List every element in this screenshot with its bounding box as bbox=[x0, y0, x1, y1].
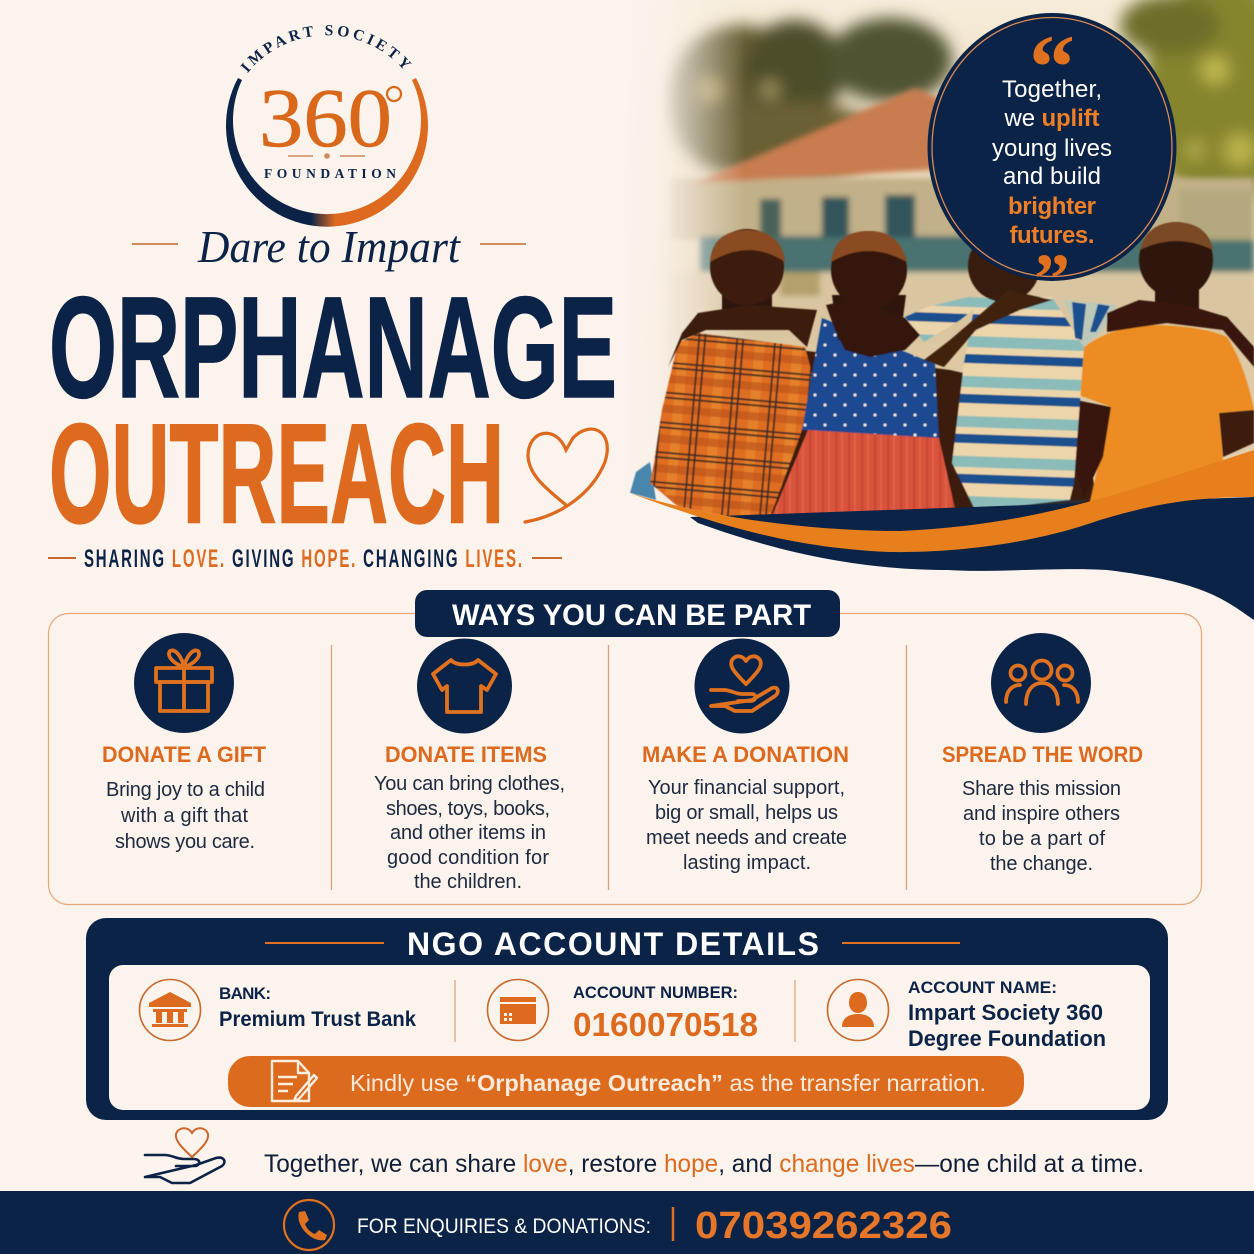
script tagline: Dare to Impart: Dare to Impart bbox=[197, 221, 461, 272]
item: make a donation: MAKE A DONATION bbox=[642, 742, 849, 767]
item: make a donation bbox=[642, 638, 849, 874]
child 2 polka dot top bbox=[802, 318, 939, 440]
icon: document and pen bbox=[272, 1061, 317, 1101]
icon: hand with heart bbox=[145, 1128, 224, 1183]
quote text: futures. bbox=[1010, 222, 1094, 249]
icon: bank bbox=[149, 992, 191, 1027]
item: spread the word: to be a part of bbox=[979, 828, 1105, 850]
child 1 plaid shirt bbox=[650, 333, 815, 528]
item: donate items: DONATE ITEMS bbox=[385, 742, 547, 767]
item: donate a gift: Bring joy to a child bbox=[106, 779, 265, 801]
child 4 shirt bbox=[1080, 324, 1254, 502]
title: ORPHANAGE: ORPHANAGE bbox=[49, 267, 617, 428]
item: spread the word: the change. bbox=[990, 853, 1093, 875]
quote text bbox=[992, 76, 1112, 249]
item: donate a gift bbox=[102, 633, 267, 853]
bank: BANK: bbox=[219, 984, 271, 1003]
item: donate items: good condition for bbox=[387, 847, 549, 869]
account number: 0160070518 bbox=[573, 1006, 758, 1043]
wave: orange and navy swoosh bbox=[630, 450, 1254, 620]
subtitle: SHARING LOVE. GIVING HOPE. CHANGING LIVES. bbox=[84, 545, 522, 573]
logo: Impart Society 360 Foundation: FOUNDATION bbox=[264, 166, 396, 181]
quote text: and build bbox=[1003, 163, 1101, 190]
narration note: Kindly use “Orphanage Outreach” as the transfer narration. bbox=[350, 1070, 986, 1096]
closing quote mark: ” bbox=[1034, 239, 1070, 319]
bank: Premium Trust Bank bbox=[219, 1008, 416, 1031]
account number: ACCOUNT NUMBER: bbox=[573, 983, 738, 1002]
footer bar: FOR ENQUIRIES & DONATIONS: bbox=[357, 1215, 651, 1238]
account name: Degree Foundation bbox=[908, 1026, 1106, 1051]
quote text: Together, bbox=[1002, 76, 1102, 103]
panel heading bbox=[415, 590, 840, 637]
panel: ways you can be part bbox=[48, 590, 1202, 904]
item: make a donation: Your financial support, bbox=[648, 777, 845, 799]
arms bbox=[668, 305, 817, 367]
narration note bbox=[228, 1056, 1024, 1107]
child 3 sleeves bbox=[905, 297, 988, 342]
item: spread the word: SPREAD THE WORD bbox=[942, 742, 1143, 767]
item: donate a gift: shows you care. bbox=[115, 831, 255, 853]
icon: heart bbox=[525, 429, 607, 522]
item: spread the word: Share this mission bbox=[962, 778, 1121, 800]
quote text: young lives bbox=[992, 135, 1112, 162]
title: OUTREACH: OUTREACH bbox=[49, 394, 504, 554]
icon: person bbox=[842, 992, 874, 1027]
item: make a donation: meet needs and create bbox=[646, 827, 847, 849]
child 2 skirt bbox=[772, 429, 956, 514]
quote text: we uplift bbox=[1004, 105, 1100, 132]
seat shadow bbox=[1016, 499, 1090, 506]
item: make a donation: lasting impact. bbox=[683, 852, 811, 874]
item: donate items: the children. bbox=[414, 871, 522, 893]
account name: Impart Society 360 bbox=[908, 1000, 1103, 1025]
account number bbox=[488, 980, 758, 1043]
hero photo: children hugging in front of a building bbox=[620, 0, 1254, 560]
icon: t-shirt bbox=[433, 660, 496, 712]
opening quote mark: “ bbox=[1029, 16, 1075, 118]
logo: Impart Society 360 Foundation: IMPART SOCIETY bbox=[240, 25, 412, 73]
item: donate a gift: DONATE A GIFT bbox=[102, 742, 267, 767]
logo: Impart Society 360 Foundation: 360 bbox=[259, 72, 392, 165]
account heading: NGO ACCOUNT DETAILS bbox=[407, 926, 819, 962]
jeans bbox=[630, 462, 656, 500]
icon: phone bbox=[298, 1211, 327, 1240]
closing message: Together, we can share love, restore hope, and change lives—one child at a time. bbox=[264, 1150, 1144, 1178]
panel: NGO account details bbox=[86, 918, 1168, 1120]
item: donate items: You can bring clothes, bbox=[374, 773, 565, 795]
child 3 striped shirt bbox=[952, 297, 1084, 520]
footer bar: 07039262326 bbox=[695, 1205, 952, 1247]
item: donate items bbox=[374, 638, 565, 893]
icon: gift bbox=[156, 650, 212, 711]
item: donate a gift: with a gift that bbox=[120, 805, 248, 827]
item: spread the word: and inspire others bbox=[963, 803, 1120, 825]
logo: Impart Society 360 Foundation bbox=[226, 25, 428, 227]
bank bbox=[140, 980, 416, 1040]
item: donate items: and other items in bbox=[390, 822, 546, 844]
item: spread the word bbox=[942, 633, 1143, 875]
heads bbox=[721, 294, 773, 310]
shadow silhouette behind the children bbox=[770, 350, 1095, 514]
footer bar bbox=[0, 1191, 1254, 1254]
icon: card bbox=[500, 997, 536, 1024]
icon: hand holding heart bbox=[711, 656, 778, 711]
quote circle bbox=[928, 13, 1176, 319]
icon: people bbox=[1006, 660, 1078, 704]
item: donate items: shoes, toys, books, bbox=[386, 798, 550, 820]
panel heading: WAYS YOU CAN BE PART bbox=[452, 599, 811, 632]
account name: ACCOUNT NAME: bbox=[908, 978, 1057, 997]
item: make a donation: big or small, helps us bbox=[655, 802, 838, 824]
account name bbox=[828, 978, 1106, 1051]
quote text: brighter bbox=[1008, 193, 1096, 220]
